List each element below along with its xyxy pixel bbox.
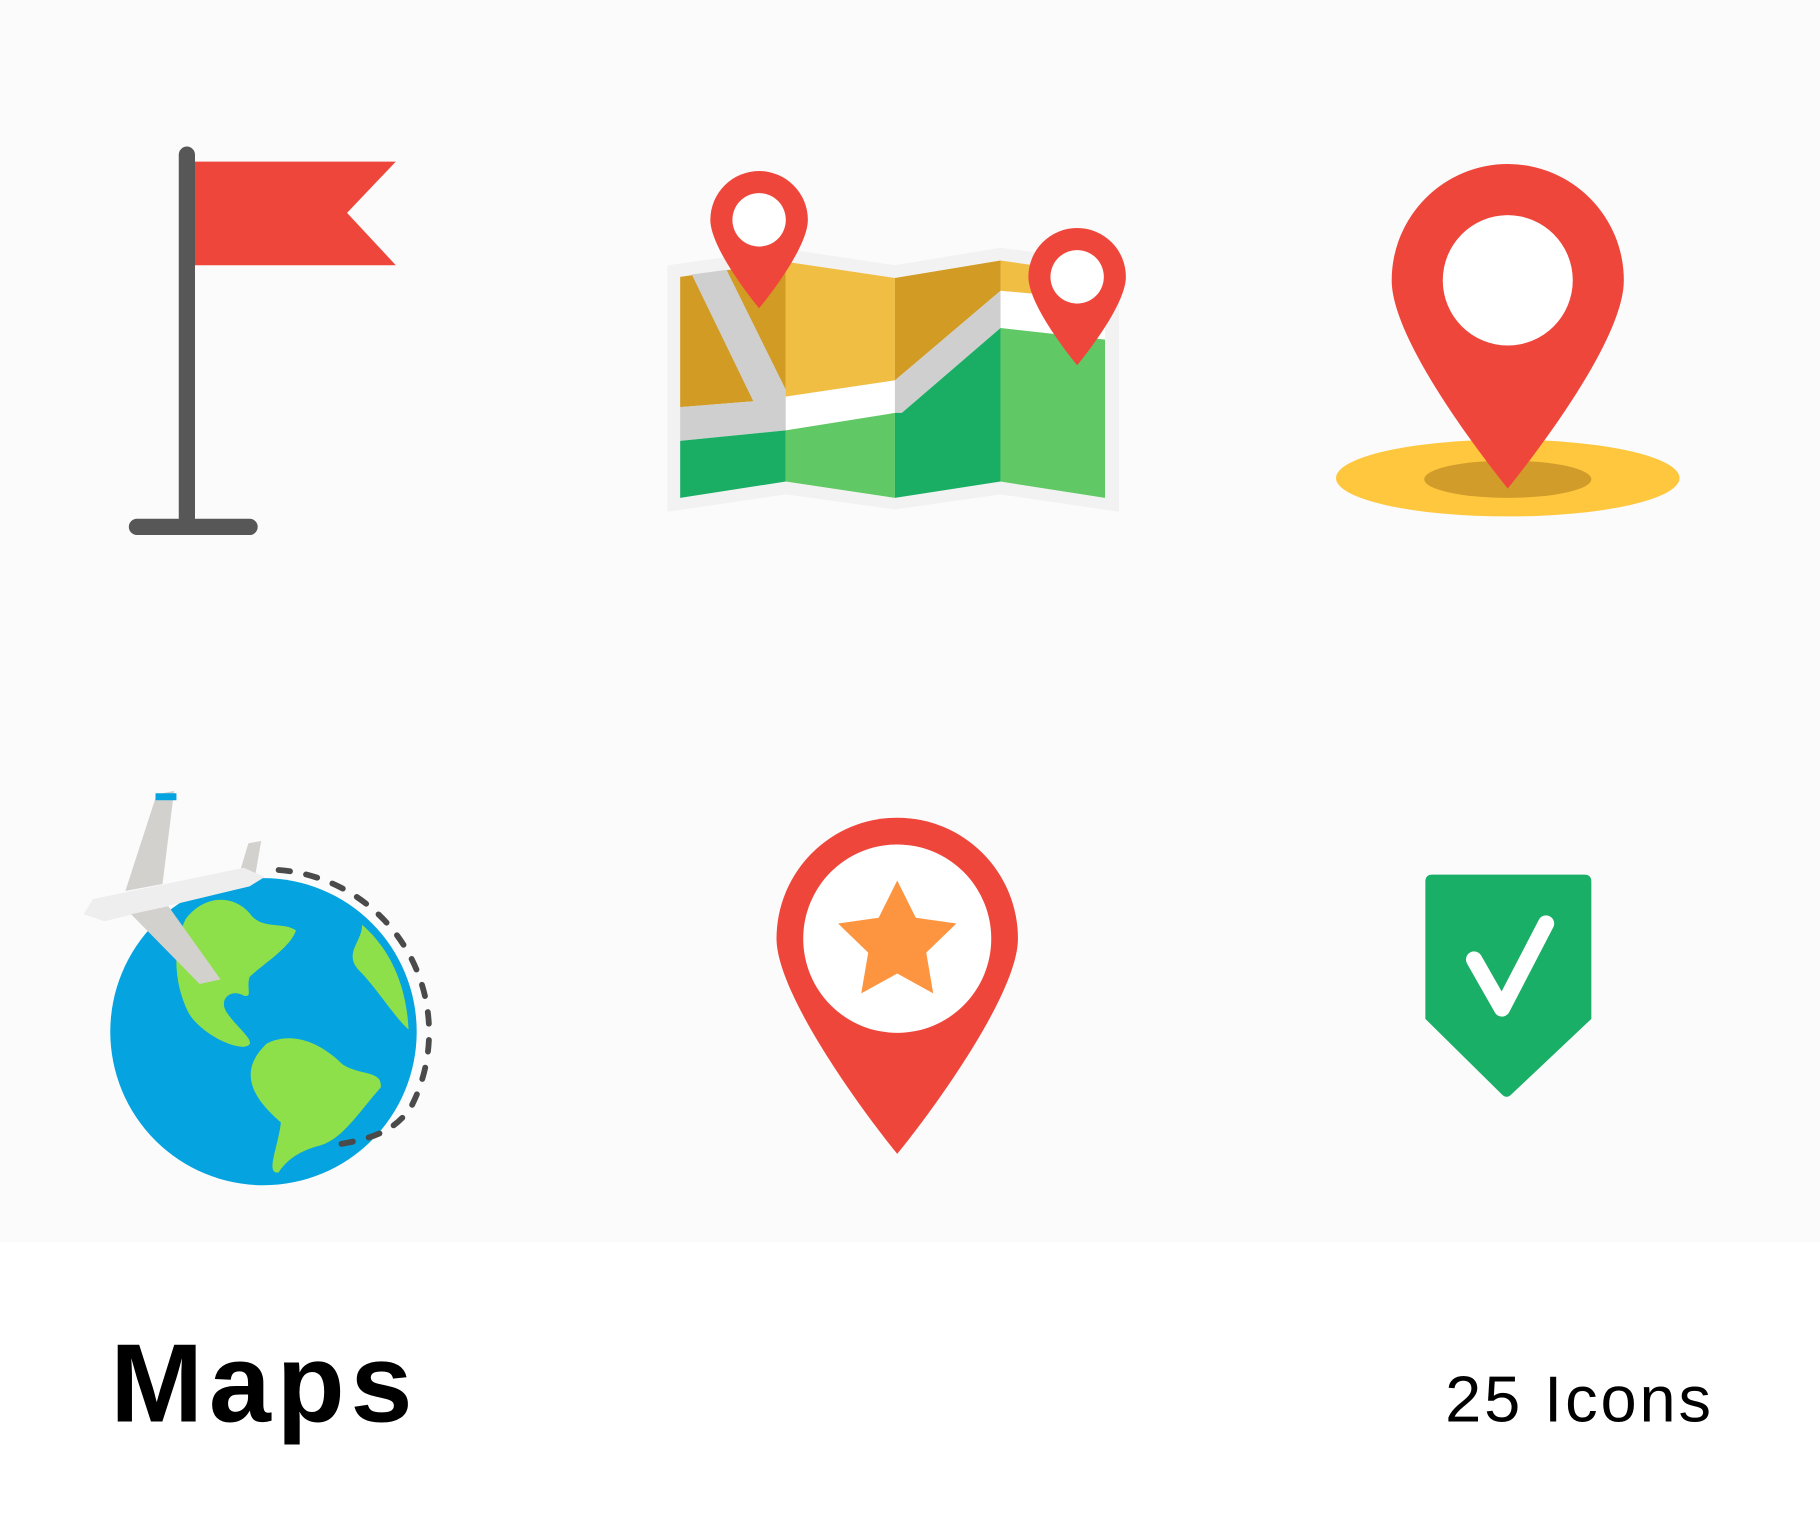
icon: folded map with pins: [667, 171, 1126, 512]
icon: check shield: [1425, 875, 1591, 1097]
icon: star pin: [777, 818, 1018, 1154]
icon: globe with plane: [84, 791, 429, 1185]
icon: location pin on spot: [1336, 164, 1680, 516]
title: Maps: [110, 1320, 418, 1445]
icon: flag: [129, 147, 396, 535]
icon count: 25 Icons: [1445, 1362, 1714, 1435]
